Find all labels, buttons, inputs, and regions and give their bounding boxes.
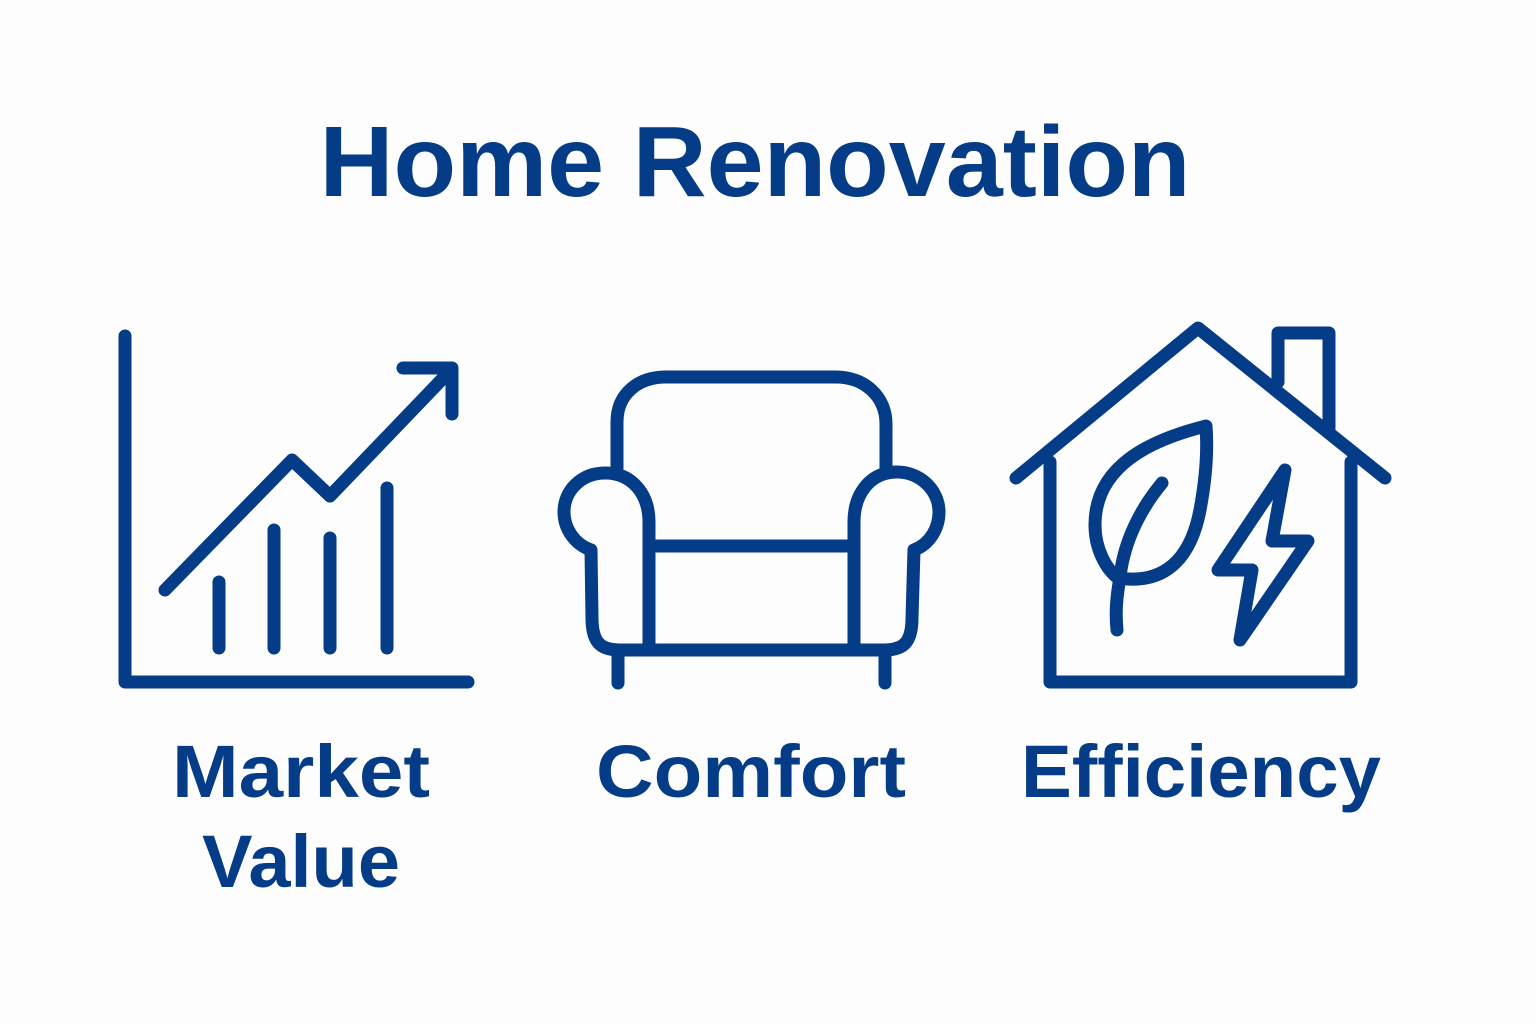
icon: lightning bolt bbox=[1218, 470, 1308, 640]
label: market value: Value bbox=[202, 820, 400, 903]
label: market value bbox=[172, 730, 430, 903]
icon: armchair bbox=[564, 377, 939, 683]
title: Home Renovation bbox=[320, 106, 1190, 218]
label: efficiency: Efficiency bbox=[1021, 730, 1381, 813]
label: market value: Market bbox=[172, 730, 430, 813]
icon: leaf bbox=[1095, 426, 1207, 630]
icon: market value chart bbox=[125, 336, 468, 682]
label: comfort: Comfort bbox=[596, 730, 906, 813]
icon: efficient house bbox=[1016, 328, 1385, 682]
